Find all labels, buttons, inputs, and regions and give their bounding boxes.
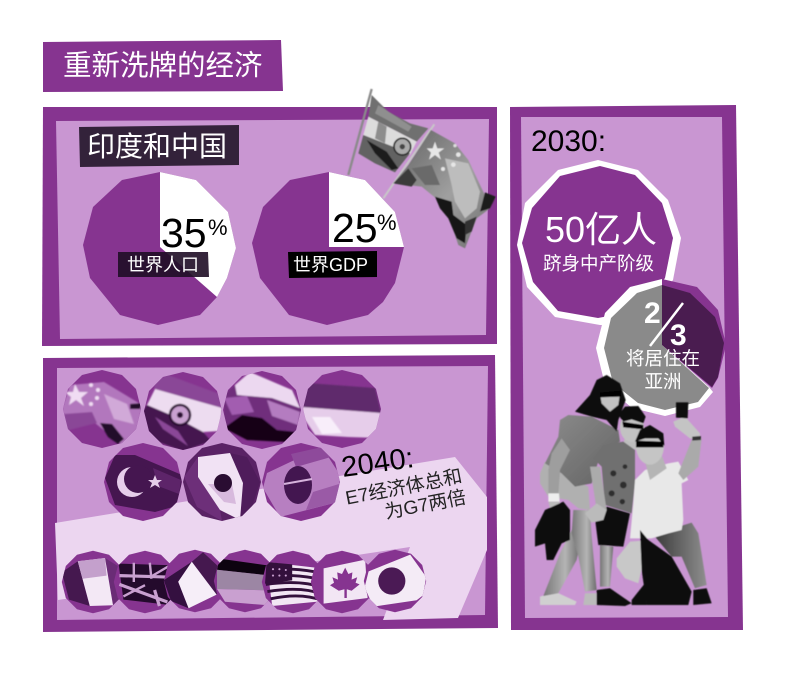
icon: Mexico flag circle	[183, 443, 261, 521]
title: 重新洗牌的经济	[63, 50, 263, 82]
icon: family taking a selfie	[535, 375, 712, 606]
text: 2040 callout: 2040:	[340, 442, 416, 484]
icon: UK flag circle	[114, 551, 176, 613]
icon: France flag circle	[164, 550, 226, 612]
panel: India and China	[42, 107, 497, 346]
icon: China flag circle	[62, 370, 142, 448]
pie chart: two thirds in Asia: 将居住在	[626, 348, 700, 369]
icon: India flag circle	[143, 372, 222, 451]
pie chart: 25% of world GDP: %	[377, 210, 397, 235]
callout: 5 billion join the middle class: 跻身中产阶级	[543, 253, 654, 274]
panel: 2030 middle class	[510, 105, 743, 630]
pie chart: two thirds in Asia: 2	[644, 297, 661, 330]
heading: India and China: 印度和中国	[87, 131, 227, 162]
heading: 2030: 2030:	[531, 125, 606, 158]
icon: Canada flag circle	[311, 551, 373, 613]
icon: Brazil flag circle	[262, 443, 340, 521]
callout: 5 billion join the middle class: 50亿人	[545, 209, 657, 250]
pie chart: 25% of world GDP: 世界GDP	[293, 255, 368, 275]
panel: E7 versus G7	[43, 355, 498, 632]
pie chart: 35% of world population	[83, 172, 236, 325]
callout: 5 billion join the middle class	[517, 160, 681, 325]
pie chart: 25% of world GDP	[252, 172, 404, 325]
pie chart: two thirds in Asia: 3	[670, 319, 687, 352]
infographic	[42, 40, 743, 632]
text: 2040 callout: E7经济体总和	[344, 465, 464, 509]
pie chart: 25% of world GDP: 25	[332, 205, 378, 251]
icon: Germany flag circle	[214, 550, 276, 612]
title	[43, 40, 283, 92]
icon: Japan flag circle	[364, 550, 426, 612]
pie chart: 35% of world population: 世界人口	[127, 255, 199, 275]
pie chart: 35% of world population: 35	[161, 210, 207, 256]
icon: Turkey flag circle	[104, 443, 182, 521]
icon: India and China flags	[348, 89, 496, 248]
pie chart: two thirds in Asia	[596, 279, 726, 416]
icon: USA flag circle	[262, 551, 324, 613]
text: 2040 callout: 为G7两倍	[383, 486, 468, 524]
icon: Italy flag circle	[62, 551, 124, 613]
heading: India and China	[79, 125, 239, 167]
text: 2040 callout	[340, 442, 468, 524]
icon: Russia flag circle	[223, 371, 301, 449]
icon: Indonesia flag circle	[302, 370, 381, 448]
pie chart: 35% of world population: %	[208, 215, 228, 240]
pie chart: two thirds in Asia: 亚洲	[644, 371, 682, 392]
